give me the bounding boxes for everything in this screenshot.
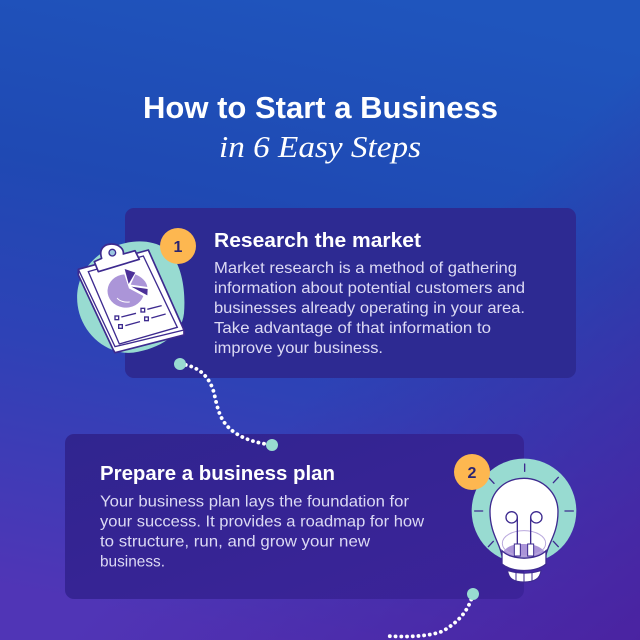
- card body text: Your business plan lays the foundation for: [100, 494, 410, 510]
- card body text: to structure, run, and grow your new: [100, 534, 370, 550]
- pie chart: [108, 274, 143, 308]
- teal blob: [77, 241, 184, 353]
- icon: light bulb: [472, 459, 576, 582]
- step badge 1: 1: [174, 239, 183, 256]
- step badge 2: [454, 454, 490, 490]
- arrow: dotted connector 1 to 2: [174, 358, 278, 451]
- card body text: business.: [100, 554, 165, 570]
- arrow: dotted connector 2 to 3: [386, 588, 479, 636]
- filament: [506, 512, 542, 544]
- card body text: improve your business.: [214, 340, 383, 357]
- icon: clipboard with pie chart: [77, 241, 184, 353]
- card heading: Research the market: [214, 230, 421, 252]
- card body text: businesses already operating in your area.: [214, 300, 525, 317]
- panel: research the market: [125, 208, 576, 378]
- card body text: [100, 494, 424, 570]
- teal circle: [472, 459, 576, 563]
- title: [143, 90, 498, 164]
- card body text: Market research is a method of gathering: [214, 260, 517, 277]
- card body text: [214, 260, 525, 357]
- card body text: information about potential customers and: [214, 280, 525, 297]
- rays: [475, 464, 573, 547]
- card heading: Prepare a business plan: [100, 463, 335, 485]
- subheading: in 6 Easy Steps: [219, 129, 421, 164]
- bulb glass: [490, 478, 558, 555]
- clipboard board: [78, 250, 184, 353]
- bulb base: [502, 551, 546, 570]
- heading: How to Start a Business: [143, 90, 498, 125]
- bulb inner glow: [503, 544, 545, 557]
- card body text: your success. It provides a roadmap for how: [100, 514, 424, 530]
- step badge 1: [160, 228, 196, 264]
- card background: [65, 434, 524, 599]
- panel: prepare a business plan: [65, 434, 524, 599]
- card background: [125, 208, 576, 378]
- clip: [94, 244, 139, 272]
- step badge 2: 2: [468, 465, 477, 482]
- card body text: Take advantage of that information to: [214, 320, 491, 337]
- legend rows: [115, 306, 166, 328]
